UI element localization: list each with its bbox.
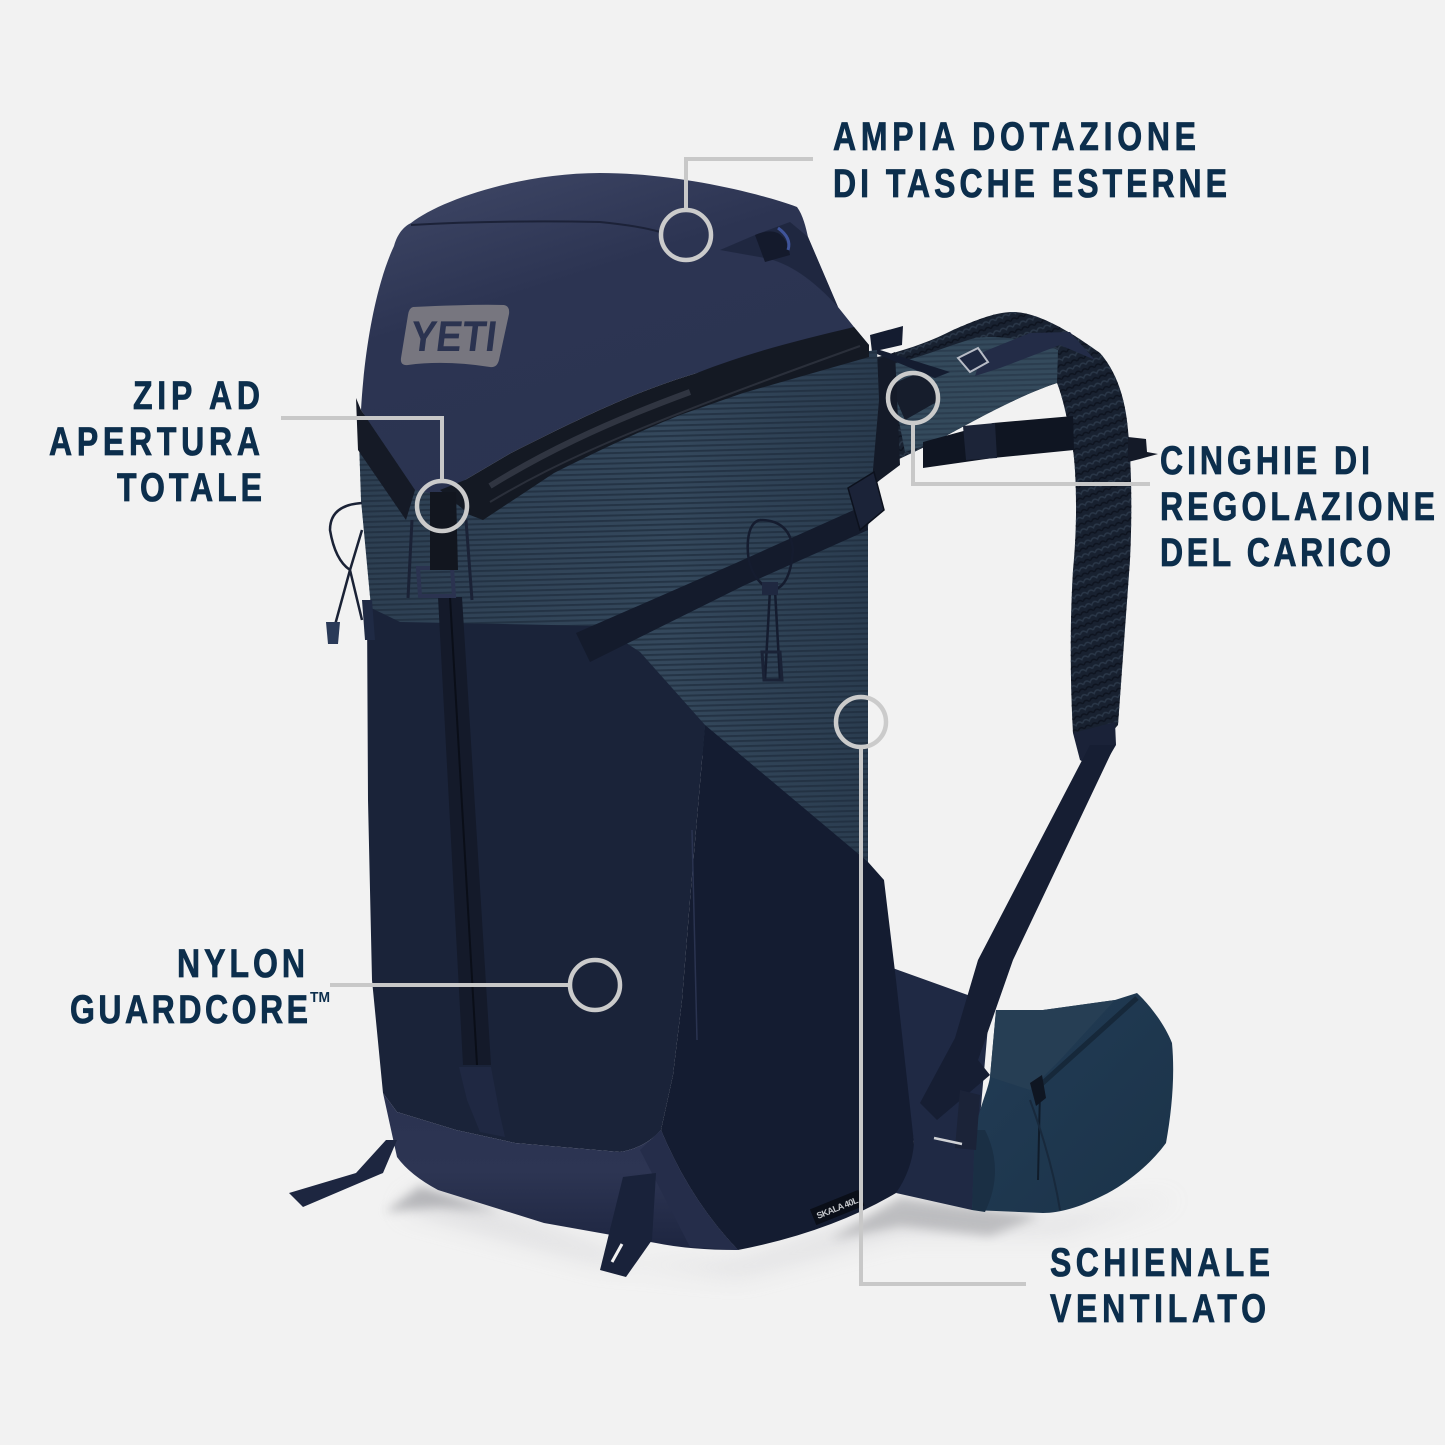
callout: nylon guardcore [70,941,620,1032]
left bungee [330,503,362,625]
top zipper [440,327,869,520]
label text: ZIP AD [133,373,260,418]
marker ring [661,210,711,260]
bungee loop [748,520,793,680]
marker ring [888,373,938,423]
floor shadow [385,1186,1180,1275]
vertical zipper [438,597,491,1065]
callout: schienale ventilato [836,697,1270,1331]
label text: VENTILATO [1050,1286,1266,1331]
hip pocket [972,993,1173,1213]
shoulder strap [868,312,1158,772]
leader line [686,159,813,210]
label text: APERTURA [49,419,260,464]
leader line [281,418,442,481]
marker ring [417,481,467,531]
label text [1160,438,1435,575]
backpack illustration [289,173,1173,1277]
label text: DEL CARICO [1160,530,1391,575]
marker ring [836,697,886,747]
leader line [330,983,570,987]
striped panel [358,350,879,870]
buckle [848,472,884,530]
callout: cinghie di regolazione del carico [888,373,1435,575]
label text [1050,1240,1270,1331]
label text: REGOLAZIONE [1160,484,1435,529]
base side strap [289,1140,397,1207]
load strap webbing [923,416,1074,468]
zip pull [418,568,454,596]
base front tab [600,1173,656,1277]
right dark panel [661,725,914,1250]
left zipper [356,398,415,520]
base [383,1093,738,1250]
leader line [861,747,1026,1284]
label text: NYLON [177,941,305,986]
webbing strap [576,505,868,662]
lower loop tab [459,1067,505,1137]
hip belt [884,965,990,1210]
label text: TM [310,989,330,1006]
callout: ampia dotazione di tasche esterne [661,114,1227,260]
leader line [913,423,1150,484]
label text: GUARDCORE [70,987,308,1032]
label text: DI TASCHE ESTERNE [833,161,1227,206]
label text: AMPIA DOTAZIONE [833,114,1196,159]
label text [70,941,330,1032]
label text [833,114,1227,206]
logo: YETI: YETI [408,313,500,361]
product tag: SKALA 40L [815,1195,860,1221]
label text: SCHIENALE [1050,1240,1270,1285]
belt buckle [934,1090,980,1150]
seam stitching [692,830,697,1040]
lid [361,173,869,495]
label text: CINGHIE DI [1160,438,1370,483]
belt strap [920,745,1115,1120]
front dark panel [367,606,705,1152]
label text [49,373,262,510]
product tag [810,1190,865,1225]
marker ring [570,960,620,1010]
main body [289,173,914,1277]
label text: TOTALE [117,465,262,510]
callout: zip ad apertura totale [49,373,467,531]
